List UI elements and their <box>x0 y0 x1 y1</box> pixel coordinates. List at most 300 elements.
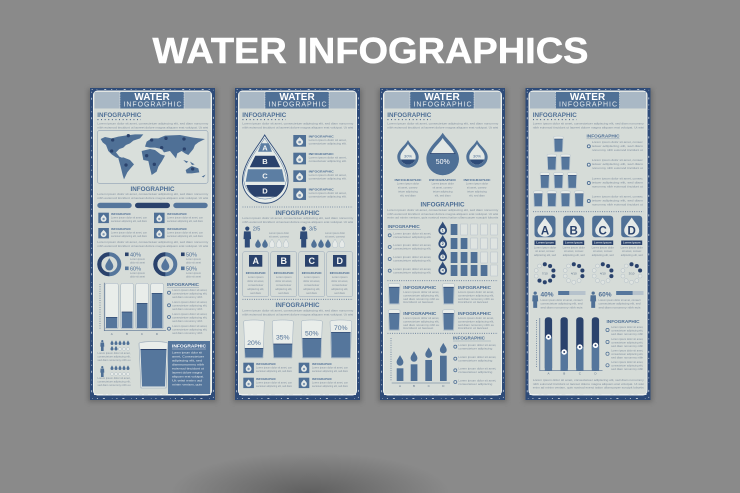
header banner <box>94 92 210 109</box>
chart notes: sed diam nonummy nibh <box>172 319 203 323</box>
chart notes: Lorem ipsum dolor sit amet, <box>611 337 643 341</box>
text block <box>97 240 209 248</box>
icon list: INFOGRAPHIC <box>111 227 132 231</box>
people fractions: sit amet, consect <box>269 234 289 238</box>
people fractions <box>244 226 345 248</box>
glass notes: consectetuer adipiscing elit, <box>458 319 494 323</box>
header banner <box>530 92 646 109</box>
letter drop cards: D <box>628 226 636 238</box>
bottom icon list: Lorem ipsum dolor sit amet, con <box>312 366 348 370</box>
chart notes: sed diam nonummy nibh <box>172 331 203 335</box>
section heading: INFOGRAPHIC <box>276 210 320 217</box>
drop list: Lorem ipsum dolor sit amet, <box>309 173 347 177</box>
bottom icon list: sectetuer adipiscing elit, sed diam <box>312 384 349 388</box>
tube bar chart: B <box>126 332 128 336</box>
people progress: 60% <box>598 292 612 298</box>
drop list: INFOGRAPHIC <box>309 170 335 174</box>
pyramid notes: INFOGRAPHIC <box>586 134 620 138</box>
card labels: Lorem ipsum <box>565 241 583 245</box>
letter cards: adipiscing elit, <box>303 287 320 291</box>
pill bar chart: D <box>594 372 597 376</box>
dot rings: 4/10 <box>571 272 577 276</box>
card labels <box>534 240 643 257</box>
pyramid notes: tetuer adipiscing elit, sed diam <box>592 162 644 166</box>
chart notes <box>453 336 497 386</box>
chart notes: consectetuer adipiscing <box>458 370 493 374</box>
section text: Lorem ipsum dolor sit amet, consectetuer adipiscing elit, sed diam nonummy <box>242 308 354 312</box>
people fractions: 3/5 <box>309 226 317 232</box>
letter cards: A <box>252 256 259 266</box>
glass notes <box>388 283 495 330</box>
pyramid notes: nonummy nibh euismod tincidunt ut <box>592 184 643 188</box>
heading: INFOGRAPHIC <box>533 112 577 119</box>
drop gauges <box>397 133 488 175</box>
letter cards: consectetuer <box>276 283 291 287</box>
ABCD drop: A <box>262 144 268 153</box>
letter cards: B <box>280 256 287 266</box>
letter cards: dolor sit amet, <box>331 279 348 283</box>
chart notes <box>167 282 208 335</box>
pyramid notes: Lorem ipsum dolor sit amet, consec <box>592 176 644 180</box>
closing text: Lorem ipsum dolor sit amet, consectetuer adipiscing elit, sed diam nonummy <box>533 378 645 382</box>
pyramid notes: tetuer adipiscing elit, sed diam <box>592 144 644 148</box>
cup pyramid <box>534 136 584 207</box>
text block: Lorem ipsum dolor sit amet, consectetuer adipiscing elit, sed diam nonummy <box>97 240 209 244</box>
people stats: Lorem ipsum dolor sit amet, <box>98 376 131 380</box>
chart notes: consectetuer adipiscing elit, <box>611 328 643 332</box>
chart notes: consectetuer adipiscing elit, <box>611 364 643 368</box>
drop list: consectetuer adipiscing elit. <box>309 142 347 146</box>
glass notes: consectetuer adipiscing elit, <box>403 319 440 323</box>
icon list: sectetuer adipiscing elit, sed diam <box>111 234 148 238</box>
gauge captions: Lorem ipsum dolor <box>466 182 488 186</box>
glass notes: tincidunt ut laoreet <box>458 300 488 304</box>
people fractions: Lorem ipsum dolor <box>325 231 345 235</box>
chart notes: Lorem ipsum dolor sit amet, <box>172 300 208 304</box>
people progress: sed diam nonummy nibh euis <box>540 306 583 310</box>
callout panel: Lorem ipsum dolor sit <box>172 350 202 354</box>
chart notes: Lorem ipsum dolor sit amet, <box>611 360 643 364</box>
people stats: consectetuer adipiscing elit, <box>98 380 131 384</box>
pills <box>97 203 208 208</box>
intro text: Lorem ipsum dolor sit amet, consectetuer adipiscing elit, sed diam nonummy <box>97 121 209 125</box>
card labels: Lorem ipsum <box>536 241 554 245</box>
people stats: sed diam nonummy nibh eu <box>98 358 131 362</box>
glass notes: sed diam nonummy nibh eu <box>403 323 440 327</box>
letter cards: consectetuer <box>248 283 263 287</box>
dot rings: 3/10 <box>629 272 635 276</box>
icon list: Lorem ipsum dolor sit amet, con <box>167 216 203 220</box>
chart notes: sed diam nonummy nibh <box>611 344 644 348</box>
pyramid notes: nonummy nibh euismod tincidunt ut <box>592 202 643 206</box>
bottom icon list: INFOGRAPHIC <box>256 362 277 366</box>
card labels: sit amet, consec <box>564 249 584 253</box>
gauge captions: tetuer adipiscing <box>398 189 418 193</box>
gauge captions: sit amet, consec- <box>433 185 453 189</box>
pyramid notes: tetuer adipiscing elit, sed diam <box>592 180 644 184</box>
section heading: INFOGRAPHIC <box>276 302 320 309</box>
chart notes: Lorem ipsum dolor sit amet, <box>611 348 643 352</box>
drop bar chart <box>391 338 450 388</box>
header banner: INFOGRAPHIC <box>559 102 617 109</box>
callout panel: diamnonummy nibh <box>172 362 204 366</box>
dot rings: 4/10 <box>600 272 606 276</box>
glass notes: tincidunt ut laoreet <box>458 326 488 330</box>
card labels: Lorem ipsum <box>623 241 641 245</box>
step notes: consectetuer adipiscing elit. <box>393 235 432 239</box>
gauge captions: Lorem ipsum dolor <box>432 182 454 186</box>
letter cards: Lorem ipsum <box>248 275 264 279</box>
header banner: INFOGRAPHIC <box>124 102 182 109</box>
letter cards: sed diam <box>306 291 318 295</box>
panel shadows <box>88 89 652 402</box>
card labels: Lorem ipsum dolor <box>621 245 643 249</box>
pill bar chart: C <box>579 372 582 376</box>
intro text <box>97 121 209 130</box>
chart notes: consectetuer adipiscing <box>458 358 493 362</box>
icon list: sectetuer adipiscing elit, sed diam <box>111 219 148 223</box>
percent glasses: 20% <box>247 340 261 347</box>
large glass <box>139 342 168 388</box>
people stats <box>98 340 131 387</box>
panel: world map and glass <box>90 88 215 400</box>
floor shadow <box>170 452 450 493</box>
callout panel: INFOGRAPHIC <box>172 344 207 348</box>
pyramid notes <box>586 134 644 206</box>
pyramid notes: tetuer adipiscing elit, sed diam <box>592 198 644 202</box>
section text: Lorem ipsum dolor sit amet, consectetuer adipiscing elit, sed diam nonummy <box>97 192 209 196</box>
glass notes: Lorem ipsum dolor sit amet, <box>458 316 494 320</box>
glass notes: consectetuer adipiscing elit, <box>458 293 494 297</box>
bottom icon list: INFOGRAPHIC <box>312 377 333 381</box>
glass notes: INFOGRAPHIC <box>403 311 437 316</box>
heading: INFOGRAPHIC <box>97 112 142 119</box>
people stats: consectetuer adipiscing elit, <box>98 354 131 358</box>
letter cards: INFOGRAPHIC <box>330 271 350 275</box>
drop list: INFOGRAPHIC <box>309 134 335 138</box>
letter cards: consectetuer <box>332 283 347 287</box>
people progress: 40% <box>540 292 554 298</box>
chart notes: Lorem ipsum dolor sit amet, <box>458 366 497 370</box>
gauge captions: INFOGRAPHIC <box>394 178 423 182</box>
letter drop cards <box>534 216 642 238</box>
closing text <box>533 378 645 390</box>
header banner: WATER <box>134 92 170 103</box>
chart notes: sed diam nonummy nibh <box>611 332 644 336</box>
people progress <box>532 291 644 310</box>
gauge captions: elit, sed diam <box>469 193 486 197</box>
donut legends: dolor sit amet <box>186 274 201 278</box>
chart notes: Lorem ipsum dolor sit amet, <box>172 312 208 316</box>
donut legends <box>125 252 202 278</box>
glass notes: INFOGRAPHIC <box>458 311 492 316</box>
section text <box>242 308 354 316</box>
chart notes: consectetuer adipiscing elit, <box>611 352 643 356</box>
letter cards: INFOGRAPHIC <box>302 271 322 275</box>
section text: Lorem ipsum dolor sit amet, consectetuer adipiscing elit, sed diam nonummy <box>242 216 354 220</box>
tube bar chart: A <box>111 332 113 336</box>
icon list: sectetuer adipiscing elit, sed diam <box>167 234 204 238</box>
donut charts <box>99 254 175 274</box>
step notes: Lorem ipsum dolor sit amet, <box>393 267 432 271</box>
drop list: consectetuer adipiscing elit. <box>309 176 347 180</box>
chart notes: consectetuer adipiscing elit, <box>172 292 208 296</box>
heading: INFOGRAPHIC <box>242 112 287 119</box>
intro text: nibh euismod tincidunt ut laoreet dolore magna aliquam erat volutpat. Ut wisi <box>242 126 354 130</box>
section text: enim ad minim veniam, quis nostrud exerci tation ullamcorper suscipit lobortis <box>387 216 499 220</box>
header banner: INFOGRAPHIC <box>268 102 326 109</box>
chart notes: INFOGRAPHIC <box>453 336 486 340</box>
bottom icon list: sectetuer adipiscing elit, sed diam <box>312 369 349 373</box>
chart notes: sed diam nonummy nibh <box>172 295 203 299</box>
dot rings: 7/10 <box>542 272 548 276</box>
chart notes: Lorem ipsum dolor sit amet, <box>172 324 208 328</box>
people fractions: 2/5 <box>253 226 260 232</box>
glass notes: sed diam nonummy nibh eu <box>403 297 440 301</box>
chart notes <box>606 319 644 371</box>
tube bar chart: C <box>141 332 144 336</box>
icon list: Lorem ipsum dolor sit amet, con <box>167 230 203 234</box>
chart notes: consectetuer adipiscing elit, <box>172 316 208 320</box>
percent glasses: 50% <box>305 330 319 337</box>
letter cards: adipiscing elit, <box>247 287 264 291</box>
glass notes: Lorem ipsum dolor sit amet, <box>403 290 440 294</box>
drop bar chart: A <box>399 384 401 388</box>
letter cards: INFOGRAPHIC <box>274 271 294 275</box>
card labels: adipiscing elit, sed <box>534 253 556 257</box>
percent glasses: 35% <box>276 335 290 342</box>
chart notes: consectetuer adipiscing elit, <box>172 328 208 332</box>
gauge captions: INFOGRAPHIC <box>464 178 492 182</box>
drop chain: 1 <box>442 229 444 233</box>
dot rings <box>534 262 642 284</box>
drop list <box>293 134 347 200</box>
bottom icon list: INFOGRAPHIC <box>312 362 333 366</box>
intro text <box>242 121 354 130</box>
header banner: INFOGRAPHIC <box>414 102 472 109</box>
panel: cup pyramid <box>526 88 650 400</box>
step notes: consectetuer adipiscing elit. <box>393 246 432 250</box>
letter cards: sed diam <box>334 291 346 295</box>
intro text: Lorem ipsum dolor sit amet, consectetuer adipiscing elit, sed diam nonummy <box>533 121 645 125</box>
bottom icon list: Lorem ipsum dolor sit amet, con <box>312 380 348 384</box>
donut legends: Lorem ipsum <box>130 271 146 275</box>
letter drop cards: C <box>599 226 607 238</box>
section text: nibh euismod tincidunt ut laoreet dolore magna aliquam erat volutpat. Ut wisi <box>97 196 209 200</box>
step notes: INFOGRAPHIC <box>388 224 421 229</box>
percent glasses <box>244 320 352 358</box>
letter cards: dolor sit amet, <box>303 279 320 283</box>
bottom icon list: Lorem ipsum dolor sit amet, con <box>256 380 292 384</box>
pyramid notes: Lorem ipsum dolor sit amet, consec <box>592 194 644 198</box>
bottom icon list <box>243 362 349 388</box>
chart notes: Lorem ipsum dolor sit amet, <box>172 288 208 292</box>
letter drop cards: B <box>570 226 578 238</box>
callout panel: minim veniam, quis <box>172 382 203 386</box>
section text: Lorem ipsum dolor sit amet, consectetuer adipiscing elit, sed diam nonummy <box>387 208 499 212</box>
drop chain: 3 <box>442 255 444 259</box>
glass notes: consectetuer adipiscing elit, <box>403 293 440 297</box>
icon list: sectetuer adipiscing elit, sed diam <box>167 219 204 223</box>
donut legends: dolor sit amet <box>130 260 145 264</box>
drop list: INFOGRAPHIC <box>309 152 335 156</box>
letter cards: C <box>308 256 315 266</box>
donut legends: Lorem ipsum <box>130 257 146 261</box>
icon list: Lorem ipsum dolor sit amet, con <box>111 230 147 234</box>
card labels: sit amet, consec <box>622 249 642 253</box>
chart notes: Lorem ipsum dolor sit amet, <box>458 355 497 359</box>
chart notes: Lorem ipsum dolor sit amet, <box>458 378 497 382</box>
drop bar chart: C <box>428 384 431 388</box>
card labels: adipiscing elit, sed <box>563 253 585 257</box>
header banner: WATER <box>279 92 315 103</box>
chart notes: Lorem ipsum dolor sit amet, <box>611 325 643 329</box>
title: WATER INFOGRAPHICS <box>152 30 588 71</box>
intro text <box>387 121 499 130</box>
section text <box>387 208 499 220</box>
pyramid notes: Lorem ipsum dolor sit amet, consec <box>592 140 644 144</box>
letter cards: dolor sit amet, <box>247 279 264 283</box>
icon list: INFOGRAPHIC <box>167 227 188 231</box>
people stats: sed diam nonummy nibh eu <box>98 383 131 387</box>
icon list <box>98 212 204 238</box>
people progress: consectetuer adipiscing elit, sed <box>598 302 641 306</box>
chart notes: sed diam nonummy nibh <box>611 367 644 371</box>
glass notes: INFOGRAPHIC <box>458 285 492 290</box>
glass notes: Lorem ipsum dolor sit amet, <box>403 316 440 320</box>
gauge captions: elit, sed diam <box>400 193 417 197</box>
gauge captions <box>394 178 492 197</box>
glass notes: sed diam nonummy nibh eu <box>458 297 495 301</box>
donut legends: 60% <box>130 266 141 272</box>
chart notes: INFOGRAPHIC <box>167 282 200 287</box>
people fractions: sit amet, consect <box>325 234 345 238</box>
people progress: Lorem ipsum dolor sit amet, consect <box>540 298 583 302</box>
donut legends: dolor sit amet <box>186 260 201 264</box>
step notes: consectetuer adipiscing elit. <box>393 270 432 274</box>
gauge captions: elit, sed diam <box>435 193 451 197</box>
people progress: sed diam nonummy nibh euis <box>598 306 641 310</box>
drop list: consectetuer adipiscing elit. <box>309 159 347 163</box>
card labels: sit amet, consec <box>593 249 613 253</box>
gauge captions: sit amet, consec- <box>467 185 487 189</box>
callout panel: euismod tincidunt ut <box>172 366 204 370</box>
drop gauges: 50% <box>436 159 450 166</box>
chart notes: consectetuer adipiscing elit, <box>172 304 208 308</box>
drop chain <box>438 221 447 275</box>
letter cards: adipiscing elit, <box>331 287 348 291</box>
letter cards: sed diam <box>250 291 262 295</box>
gauge captions: INFOGRAPHIC <box>429 178 457 182</box>
bottom icon list: Lorem ipsum dolor sit amet, con <box>256 366 292 370</box>
card labels: adipiscing elit, sed <box>592 253 614 257</box>
step notes: consectetuer adipiscing elit. <box>393 258 432 262</box>
closing text: nibh euismod tincidunt ut laoreet dolore magna aliquam erat volutpat. Ut wisi <box>533 382 644 386</box>
callout panel: adipiscing elit, sed <box>172 358 202 362</box>
ABCD drop: D <box>262 186 268 196</box>
chart notes: consectetuer adipiscing elit, <box>611 340 643 344</box>
step notes <box>388 224 432 274</box>
people progress: consectetuer adipiscing elit, sed <box>540 302 583 306</box>
chart notes: sed diam nonummy nibh <box>172 307 203 311</box>
intro text: Lorem ipsum dolor sit amet, consectetuer adipiscing elit, sed diam nonummy <box>387 121 499 125</box>
callout panel: amet, Consectetuer <box>172 354 204 358</box>
glass notes: sed diam nonummy nibh eu <box>458 323 495 327</box>
chart notes: INFOGRAPHIC <box>606 319 640 324</box>
drop list: consectetuer adipiscing elit. <box>309 194 347 198</box>
callout panel: Ut wisi enim ad <box>172 378 203 382</box>
drop chain: 4 <box>442 269 444 273</box>
letter cards: Lorem ipsum <box>332 275 348 279</box>
donut legends: 50% <box>186 266 197 272</box>
glass notes: Lorem ipsum dolor sit amet, <box>458 290 494 294</box>
letter cards: dolor sit amet, <box>275 279 292 283</box>
header banner <box>384 92 500 109</box>
intro text <box>533 121 645 130</box>
drop list: Lorem ipsum dolor sit amet, <box>309 191 347 195</box>
section text: nibh euismod tincidunt ut laoreet dolore magna aliquam erat volutpat. Ut wisi <box>242 220 354 224</box>
drop gauges: 30% <box>404 154 412 158</box>
donut legends: Lorem ipsum <box>186 257 202 261</box>
intro text: nibh euismod tincidunt ut laoreet dolore magna aliquam erat volutpat. Ut wisi <box>387 126 499 130</box>
letter cards: INFOGRAPHIC <box>246 271 266 275</box>
drop gauges: 30% <box>473 154 481 158</box>
letter drop cards: A <box>541 226 549 238</box>
drop bar chart: D <box>442 384 445 388</box>
drop bar chart: B <box>413 384 415 388</box>
pyramid notes: nonummy nibh euismod tincidunt ut <box>592 148 643 152</box>
card labels: Lorem ipsum dolor <box>534 245 556 249</box>
ABCD drop: B <box>262 157 268 166</box>
pill bar chart: B <box>563 372 565 376</box>
bottom icon list: sectetuer adipiscing elit, sed diam <box>256 384 293 388</box>
pyramid notes: nonummy nibh euismod tincidunt ut <box>592 166 643 170</box>
section text <box>242 216 354 224</box>
section heading: INFOGRAPHIC <box>420 202 465 208</box>
panel: drop gauges <box>380 88 505 400</box>
section text <box>97 192 209 200</box>
bottom icon list: sectetuer adipiscing elit, sed diam <box>256 369 293 373</box>
letter cards <box>243 252 353 297</box>
pictogram grid <box>451 224 497 276</box>
gauge captions: tetuer adipiscing <box>433 189 453 193</box>
gauge captions: tetuer adipiscing <box>467 189 487 193</box>
ABCD drop: C <box>262 171 268 180</box>
card labels: Lorem ipsum <box>594 241 612 245</box>
gauge captions: sit amet, consec- <box>398 185 418 189</box>
icon list: Lorem ipsum dolor sit amet, con <box>111 216 147 220</box>
header banner <box>240 92 356 109</box>
world map <box>97 131 208 183</box>
step notes: Lorem ipsum dolor sit amet, <box>393 232 432 236</box>
icon list: INFOGRAPHIC <box>111 212 132 216</box>
drop chain: 2 <box>442 242 444 246</box>
drop list: Lorem ipsum dolor sit amet, <box>309 138 347 142</box>
donut legends: dolor sit amet <box>130 274 145 278</box>
card labels: adipiscing elit, sed <box>621 253 643 257</box>
header banner: WATER <box>424 92 460 103</box>
callout panel: aliquam erat volutpat. <box>172 374 204 378</box>
section text: nibh euismod tincidunt ut laoreet dolore magna aliquam erat volutpat. Ut wisi <box>242 312 354 316</box>
chart notes: consectetuer adipiscing <box>458 346 493 350</box>
glass notes: tincidunt ut laoreet <box>403 300 434 304</box>
tube bar chart: D <box>156 332 159 336</box>
section heading: INFOGRAPHIC <box>130 186 175 193</box>
callout panel: laoreet dolore magna <box>172 370 202 374</box>
letter cards: Lorem ipsum <box>276 275 292 279</box>
percent glasses: 70% <box>334 325 348 332</box>
chart notes: Lorem ipsum dolor sit amet, <box>458 343 497 347</box>
